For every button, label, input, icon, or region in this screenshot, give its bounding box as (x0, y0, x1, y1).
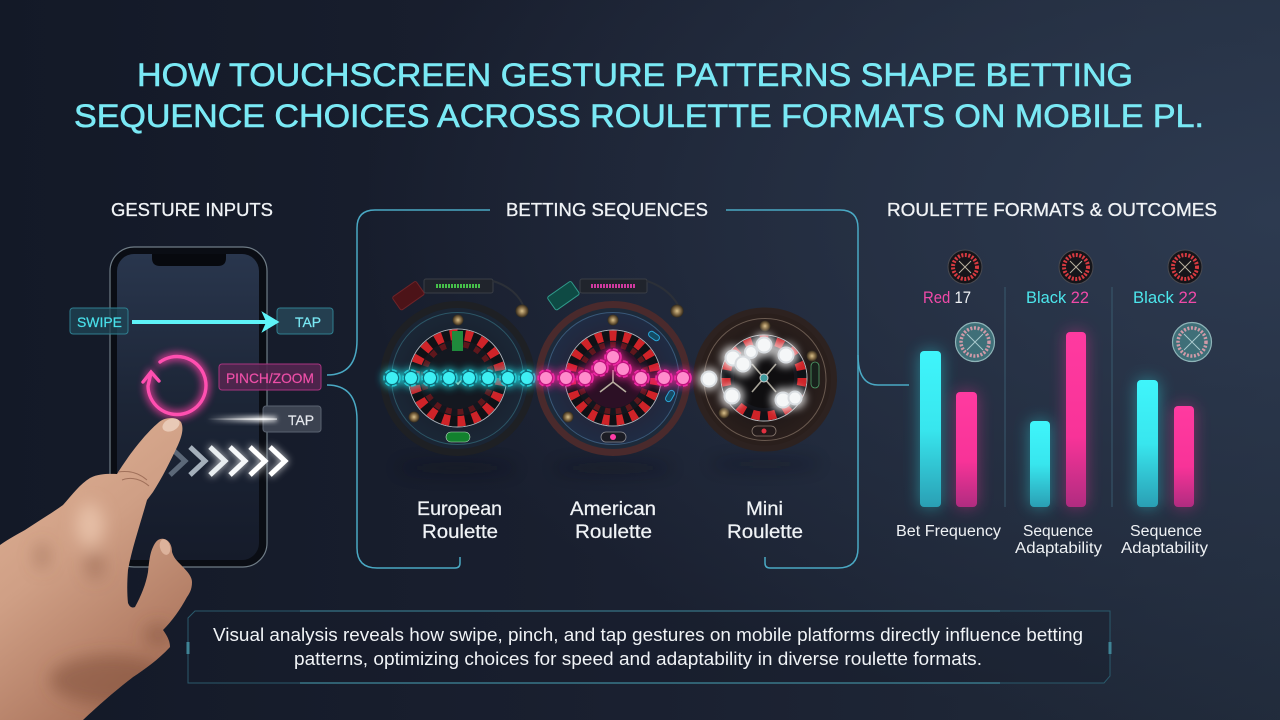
gesture: tap label cyan (277, 308, 333, 334)
gesture: tap label cyan: TAP (295, 314, 321, 330)
arrow: swipe (132, 313, 278, 331)
chart label: sequence adaptability 2: Adaptability (1121, 540, 1208, 557)
thumbnail (158, 538, 172, 556)
bet tag: green card and label (547, 279, 684, 318)
chart label: sequence adaptability 1: Adaptability (1015, 540, 1102, 557)
icon: pinch rotate ring (143, 356, 206, 414)
gesture: tap label grey (207, 406, 321, 432)
title: SEQUENCE CHOICES ACROSS ROULETTE FORMATS ON MOBILE PL. (74, 98, 1204, 134)
gesture: swipe label: SWIPE (77, 314, 122, 330)
heading: gesture inputs: GESTURE INPUTS (111, 199, 273, 220)
label: American Roulette: Roulette (575, 522, 652, 543)
heading: betting sequences: BETTING SEQUENCES (506, 199, 708, 220)
wheel shadows (397, 458, 820, 475)
phone screen (117, 254, 259, 560)
chart label: bet frequency: Bet Frequency (896, 523, 1001, 540)
label: Mini Roulette: Mini (746, 499, 783, 520)
roulette wheel: American (539, 279, 687, 452)
label: American Roulette (570, 499, 656, 543)
pink chip sequence (536, 347, 693, 388)
label: European Roulette: European (417, 499, 502, 520)
callout: summary box (188, 611, 1110, 683)
label: Mini Roulette (727, 499, 803, 543)
roulette wheel: Mini (696, 310, 834, 448)
bracket frame around betting sequences (327, 210, 909, 568)
teal wheel icons (956, 322, 1212, 362)
callout: summary box: patterns, optimizing choices for speed and adaptability in diverse roulette formats. (294, 649, 982, 669)
white chip sequence (698, 333, 806, 412)
bar chart: sequence adaptability 2 (1137, 380, 1194, 507)
bet tag: red card and label (392, 279, 528, 318)
phone notch (152, 254, 226, 266)
bar chart: sequence adaptability 1 (1030, 332, 1086, 507)
chart label: sequence adaptability 2: Sequence (1130, 523, 1202, 540)
gesture: pinch zoom label (219, 364, 321, 390)
label: European Roulette: Roulette (422, 522, 498, 543)
title (74, 57, 1204, 134)
small wheel icons (948, 250, 1202, 284)
gesture: tap label grey: TAP (288, 412, 314, 428)
hand shading (34, 503, 172, 705)
chart label: sequence adaptability 2 (1121, 523, 1208, 557)
chart 2 label: Black 22: Black 22 (1026, 289, 1089, 307)
label: American Roulette: American (570, 499, 656, 520)
phone (110, 247, 267, 567)
hand pointing at screen (0, 416, 192, 720)
chart label: sequence adaptability 1 (1015, 523, 1102, 557)
title: HOW TOUCHSCREEN GESTURE PATTERNS SHAPE BETTING (137, 57, 1133, 93)
chart label: sequence adaptability 1: Sequence (1023, 523, 1093, 540)
chart 1 label: Red 17: Red 17 (923, 289, 971, 307)
bar chart: bet frequency (920, 351, 977, 507)
label: European Roulette (417, 499, 502, 543)
chart dividers (1005, 287, 1112, 507)
icon: chevrons (170, 447, 285, 475)
gesture: pinch zoom label: PINCH/ZOOM (226, 370, 314, 386)
roulette wheel: European (384, 279, 532, 452)
fingernail (160, 416, 182, 434)
gesture: swipe label (70, 308, 128, 334)
label: Mini Roulette: Roulette (727, 522, 803, 543)
callout: summary box: Visual analysis reveals how swipe, pinch, and tap gestures on mobile platforms directly influence betting (213, 625, 1083, 645)
heading: roulette formats and outcomes: ROULETTE FORMATS & OUTCOMES (887, 199, 1217, 220)
chart 3 label: Black 22: Black 22 (1133, 289, 1197, 307)
cyan chip sequence (382, 368, 537, 388)
